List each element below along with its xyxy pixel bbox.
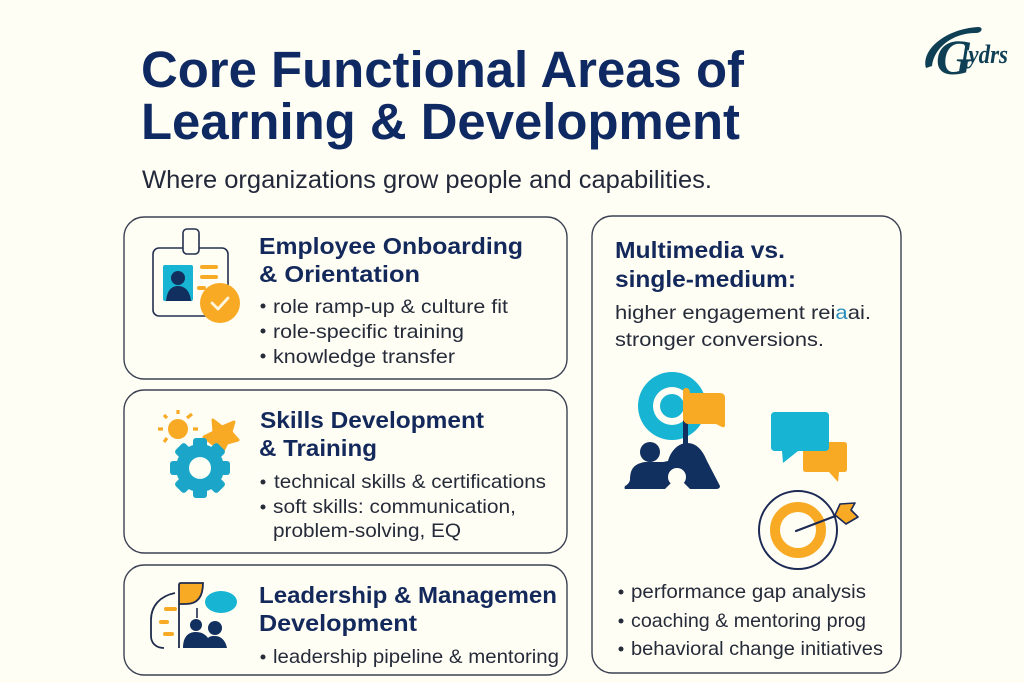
icon: leadership team with flag	[151, 583, 237, 648]
card heading: leadership	[259, 582, 557, 636]
logo: Glydrs signature: lydrs	[962, 40, 1008, 69]
logo: Glydrs signature: G	[936, 29, 972, 85]
icon: gear, sun and star	[158, 410, 238, 498]
body text: multimedia: stronger conversions.	[615, 329, 824, 351]
card heading: multimedia	[615, 237, 796, 292]
bullet list: employee onboarding: knowledge transfer	[273, 346, 456, 368]
logo: Glydrs signature	[925, 27, 1008, 85]
bullet list: skills development	[260, 471, 546, 542]
icon: speech bubbles	[771, 412, 847, 482]
card heading: skills development	[259, 407, 484, 461]
card heading: leadership: Development	[259, 610, 417, 636]
body text: multimedia	[615, 302, 871, 351]
bullet list: multimedia: behavioral change initiatives	[631, 638, 883, 660]
card heading: employee onboarding: & Orientation	[259, 261, 420, 287]
title	[141, 41, 745, 150]
panel: leadership and management	[124, 565, 567, 675]
bullet list: employee onboarding	[260, 296, 509, 368]
bullet list: skills development: problem-solving, EQ	[273, 520, 461, 542]
bullet list: multimedia	[618, 581, 883, 660]
bullet list: skills development: soft skills: communication,	[273, 496, 516, 518]
panel: employee onboarding	[124, 217, 567, 379]
card heading: employee onboarding: Employee Onboarding	[259, 233, 523, 259]
bullet list: multimedia: coaching & mentoring prog	[631, 610, 866, 632]
title: Learning & Development	[141, 93, 740, 150]
card heading: multimedia: Multimedia vs.	[615, 237, 785, 263]
card heading: skills development: Skills Development	[260, 407, 484, 433]
icon: ID badge with check	[153, 229, 240, 323]
body text: multimedia: higher engagement rei aai.	[615, 302, 871, 324]
card heading: leadership: Leadership & Managemen	[259, 582, 557, 608]
subtitle: Where organizations grow people and capabilities.	[142, 166, 712, 194]
bullet list: multimedia: performance gap analysis	[631, 581, 866, 603]
icon: target with arrow	[759, 491, 858, 569]
bullet list: leadership: leadership pipeline & mentoring	[273, 646, 559, 668]
panel: skills development	[124, 390, 567, 553]
bullet list: skills development: technical skills & certifications	[274, 471, 546, 493]
icon: people with flag	[624, 372, 725, 489]
bullet list: employee onboarding: role ramp-up & culture fit	[273, 296, 509, 318]
card heading: multimedia: single-medium:	[615, 266, 796, 292]
panel: multimedia vs single-medium	[592, 216, 901, 673]
card heading: skills development: & Training	[259, 435, 377, 461]
title: Core Functional Areas of	[141, 41, 745, 98]
card heading: employee onboarding	[259, 233, 523, 287]
bullet list: employee onboarding: role-specific training	[273, 321, 464, 343]
